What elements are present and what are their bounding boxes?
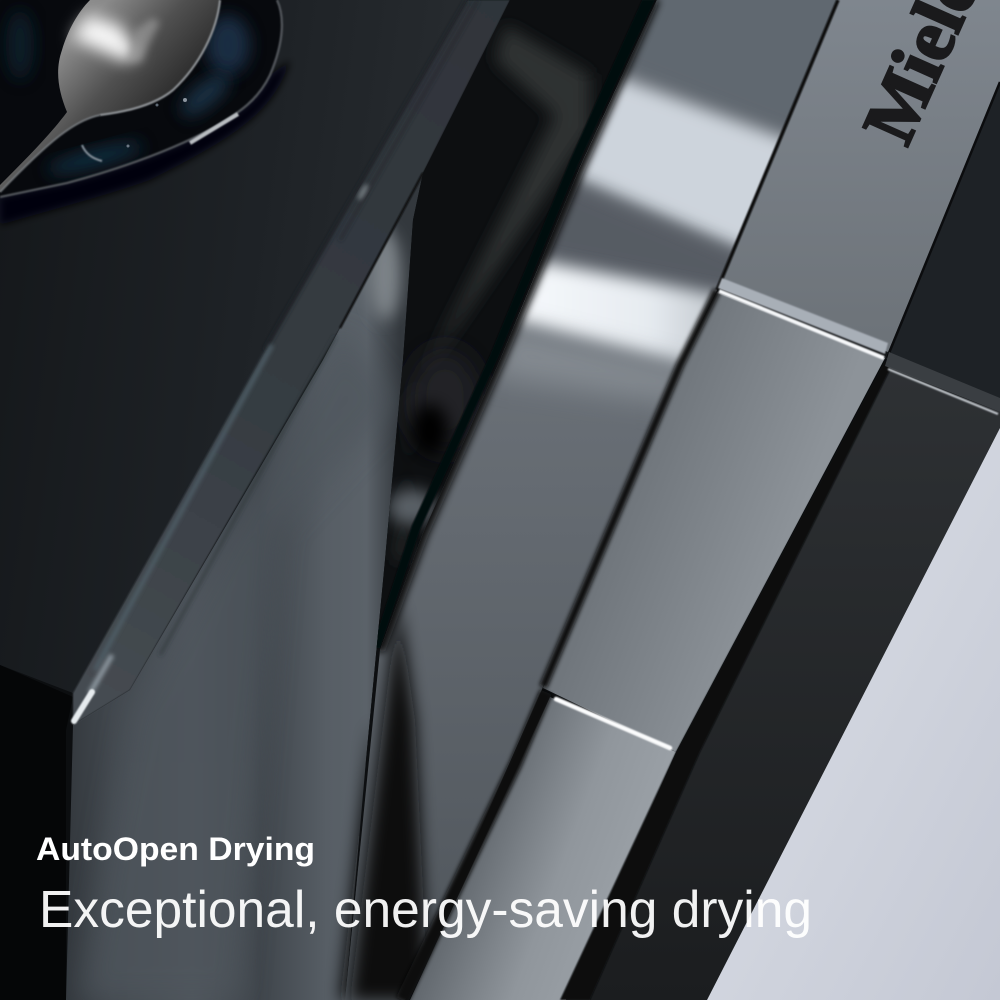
icon: glinting bevel tip (74, 655, 112, 721)
panel: bevelled worktop edge (73, 0, 510, 725)
panel: brushed steel Miele strip (717, 0, 1000, 358)
plate rim (0, 0, 282, 197)
heading: AutoOpen Drying: AutoOpen Drying (36, 831, 315, 867)
crescent glint (82, 145, 102, 161)
icon: plate shadow (0, 60, 290, 225)
rim glint (190, 114, 238, 143)
bright band two (510, 262, 740, 368)
panel: curved chrome trim with light bands (340, 0, 880, 1000)
panel: black door side strip (566, 368, 1000, 1000)
panel: strip shadow edge (560, 360, 891, 1000)
panel: reflective door face (60, 170, 430, 1000)
left chrome shadow (350, 600, 428, 1000)
bright band one (574, 72, 782, 252)
panel: pale light side surface (707, 428, 1000, 1000)
panel: dark recess with reflections (346, 0, 654, 990)
panel: dark band above strip highlight (885, 352, 1000, 412)
panel: shadow left of lower silver (402, 692, 546, 1000)
panel: highlight on dark strip corner (888, 369, 998, 414)
panel: black lower left corner (0, 665, 73, 1000)
dark reflection band (546, 181, 734, 290)
soft lower fade (490, 325, 700, 405)
panel: highlight line on steel (718, 278, 888, 358)
icon: plate with speckled glaze (0, 0, 282, 197)
panel: upper brushed silver door panel (543, 292, 885, 752)
panel: lower silver door panel (410, 697, 676, 1000)
panel: dark worktop surface (0, 0, 467, 693)
panel: dark top right control area (885, 80, 1000, 400)
subheading: Exceptional, energy-saving drying: Exceptional, energy-saving drying (39, 881, 812, 939)
panel: dark gap left of silver panel (543, 290, 717, 687)
icon: spoon (0, 0, 220, 192)
top reflection (627, 0, 835, 124)
